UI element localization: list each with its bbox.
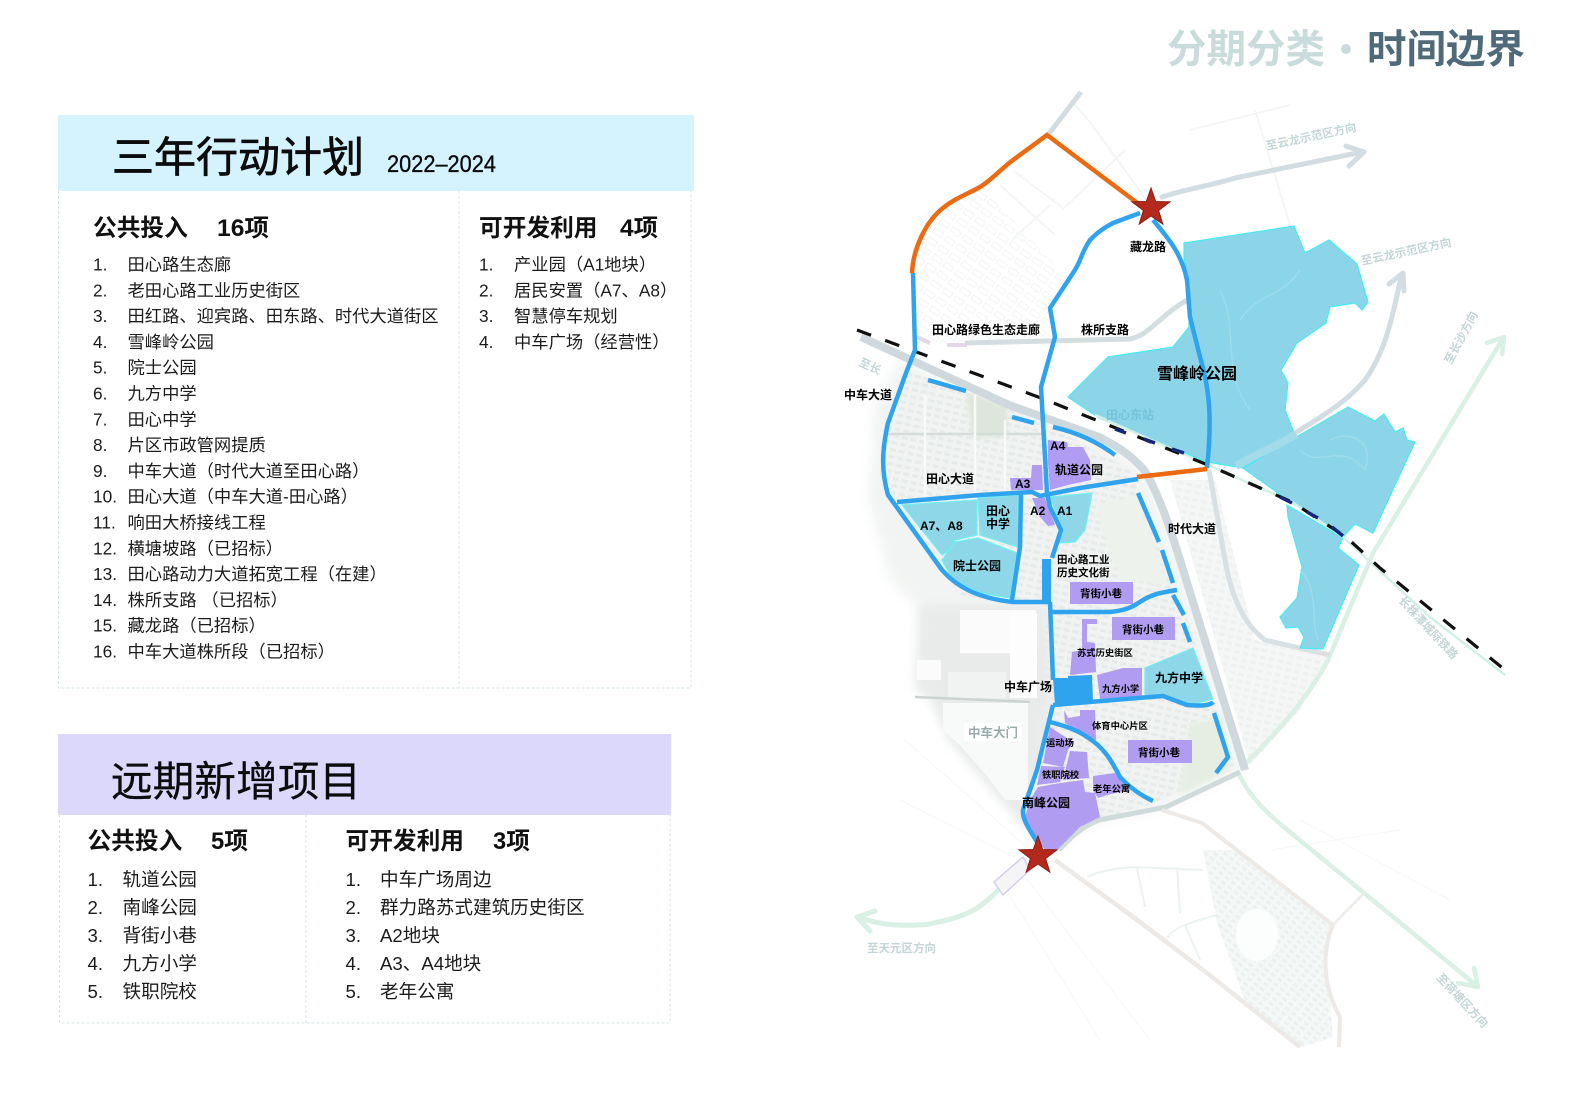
three-year plan header band: 三年行动计划	[112, 134, 364, 181]
map labels: roads and places: 院士公园	[953, 558, 1001, 573]
map labels: roads and places: 轨道公园	[1055, 462, 1103, 477]
map labels: roads and places: 南峰公园	[1022, 795, 1070, 810]
column: public investment 16 items: 3.	[93, 306, 107, 326]
soft green patches	[967, 393, 1007, 437]
orange roads	[912, 135, 1207, 477]
map labels: roads and places: 田心	[986, 504, 1010, 518]
east residential	[1170, 480, 1330, 765]
column: public investment 5 items: 2.	[88, 897, 103, 918]
three-year plan header band	[58, 115, 694, 191]
base map context	[868, 100, 1450, 1047]
column: developable 4 items: 4.	[479, 332, 493, 352]
column: public investment 16 items: 14.	[93, 590, 117, 610]
map labels: roads and places: 背街小巷	[1122, 623, 1164, 636]
column: public investment 5 items: 1.	[88, 869, 103, 890]
column: public investment 16 items: 雪峰岭公园	[128, 332, 214, 352]
column: developable 5 items: 群力路苏式建筑历史街区	[380, 897, 585, 918]
column: developable 5 items: 可开发利用	[346, 828, 464, 855]
column: public investment 16 items: 16项	[217, 216, 269, 242]
column: public investment 16 items: 九方中学	[128, 384, 197, 404]
column: developable 4 items: 居民安置（A7、A8）	[514, 280, 677, 300]
map labels: roads and places: 株所支路	[1081, 322, 1129, 337]
column: developable 4 items: 1.	[479, 254, 493, 274]
map labels: roads and places: A4	[1050, 439, 1066, 453]
map labels: roads and places: A2	[1030, 504, 1046, 518]
column: public investment 16 items: 11.	[93, 512, 116, 532]
column: developable 5 items: 5.	[346, 981, 361, 1002]
map labels: roads and places: 运动场	[1046, 737, 1074, 748]
column: developable 5 items: 4.	[346, 953, 361, 974]
north faint estate	[915, 190, 1060, 345]
column: developable 4 items: 2.	[479, 280, 493, 300]
column: public investment 16 items: 老田心路工业历史街区	[128, 280, 300, 300]
column: public investment 5 items: 5项	[211, 829, 248, 855]
column: public investment 16 items: 10.	[93, 487, 117, 507]
map labels: direction and context: 至天元区方向	[867, 941, 936, 955]
arrow: to Changsha	[1247, 337, 1504, 762]
column: public investment 16 items	[93, 215, 439, 662]
map labels: roads and places: 藏龙路	[1130, 239, 1166, 254]
column: developable 5 items: 3项	[493, 829, 530, 855]
column: public investment 16 items: 响田大桥接线工程	[128, 512, 266, 532]
column: public investment 5 items: 3.	[88, 925, 103, 946]
south-east residential cluster	[1203, 850, 1333, 1047]
map labels: roads and places: 体育中心片区	[1092, 720, 1148, 731]
column: public investment 16 items: 田心大道（中车大道-田心路）	[128, 487, 358, 507]
long-term header band	[58, 734, 671, 815]
column: public investment 16 items: 院士公园	[128, 358, 197, 378]
map	[844, 92, 1505, 1047]
map labels: roads and places: 田心大道	[926, 471, 974, 486]
map labels: roads and places: 时代大道	[1168, 521, 1216, 536]
column: public investment 16 items: 4.	[93, 332, 107, 352]
road widened blocks	[1042, 559, 1093, 705]
map labels: direction and context: 田心东站	[1106, 407, 1154, 422]
map labels: direction and context: 至云龙示范区方向	[1360, 235, 1453, 268]
column: public investment 5 items: 轨道公园	[122, 869, 197, 890]
map labels: roads and places: 九方中学	[1155, 670, 1203, 685]
map labels: direction and context: 至荷塘区方向	[1434, 970, 1491, 1031]
column: public investment 5 items: 铁职院校	[122, 981, 197, 1002]
panel: three-year action plan	[58, 115, 694, 688]
map labels: roads and places: 中学	[986, 516, 1010, 531]
map labels: roads and places: 雪峰岭公园	[1157, 364, 1237, 383]
map labels: roads and places: A1	[1057, 504, 1073, 518]
map labels: direction and context: 至云龙示范区方向	[1265, 120, 1358, 153]
park texture and river band	[1220, 270, 1367, 640]
column: public investment 16 items: 1.	[93, 254, 107, 274]
column: developable 5 items: 2.	[346, 897, 361, 918]
column: public investment 16 items: 7.	[93, 409, 107, 429]
arrow: to Hetang	[1238, 773, 1478, 987]
map labels: roads and places: 九方小学	[1102, 683, 1139, 694]
star: south node	[1019, 836, 1057, 872]
map labels: roads and places: A3	[1015, 477, 1031, 491]
map labels: roads and places: 田心路绿色生态走廊	[932, 322, 1040, 337]
column: public investment 5 items: 九方小学	[122, 953, 197, 974]
map labels: roads and places: 田心路工业	[1057, 553, 1110, 566]
map labels: direction and context: 至长	[857, 355, 884, 378]
column: developable 4 items: 智慧停车规划	[514, 306, 618, 326]
column: public investment 16 items: 12.	[93, 538, 117, 558]
column: public investment 16 items: 2.	[93, 280, 107, 300]
column: public investment 5 items: 公共投入	[88, 828, 183, 855]
page title: 时间边界	[1367, 28, 1525, 72]
map labels: roads and places: 苏式历史街区	[1077, 647, 1133, 658]
long-term header band: 远期新增项目	[111, 758, 361, 805]
column: developable 5 items: A2地块	[380, 925, 440, 946]
direction arrows	[857, 146, 1504, 987]
column: public investment 16 items: 公共投入	[93, 215, 188, 242]
column: public investment 16 items: 中车大道株所段（已招标）	[128, 642, 335, 662]
west factory zone	[915, 605, 1050, 835]
column: public investment 16 items: 8.	[93, 435, 107, 455]
column: developable 4 items: 产业园（A1地块）	[514, 254, 656, 274]
page title: 分期分类	[1167, 28, 1325, 72]
blue roads	[883, 213, 1228, 842]
map labels: roads and places: 背街小巷	[1080, 587, 1122, 600]
railway dashed line	[857, 330, 1505, 675]
column: public investment 16 items: 6.	[93, 384, 107, 404]
map labels: direction and context: 至长沙方向	[1441, 309, 1481, 366]
column: public investment 16 items: 横塘坡路（已招标）	[128, 538, 283, 558]
column: developable 4 items: 可开发利用	[479, 215, 597, 242]
column: public investment 16 items: 田心路生态廊	[128, 254, 231, 274]
map labels: direction and context	[857, 120, 1491, 1031]
arrow: to Tianyuan	[857, 878, 1010, 931]
column: public investment 5 items	[88, 828, 248, 1002]
column: public investment 16 items: 5.	[93, 358, 107, 378]
column: developable 5 items: 中车广场周边	[380, 869, 492, 890]
map labels: direction and context: 长株潭城际铁路	[1396, 593, 1461, 662]
column: public investment 16 items: 13.	[93, 564, 117, 584]
purple parcels	[1010, 440, 1192, 851]
column: public investment 16 items: 田红路、迎宾路、田东路、时代大道街区	[128, 306, 439, 326]
column: developable 4 items: 中车广场（经营性）	[514, 332, 670, 352]
column: developable 5 items: 1.	[346, 869, 361, 890]
column: public investment 16 items: 片区市政管网提质	[128, 435, 266, 455]
page title	[1167, 28, 1525, 72]
column: public investment 16 items: 田心中学	[128, 409, 197, 429]
column: developable 5 items	[346, 828, 585, 1002]
three-year plan header band: 2022–2024	[387, 151, 496, 178]
map labels: roads and places: A7、A8	[920, 519, 963, 533]
map labels: roads and places: 背街小巷	[1138, 746, 1180, 759]
map labels: roads and places	[844, 239, 1237, 810]
column: developable 4 items	[479, 215, 677, 352]
map labels: roads and places: 中车广场	[1004, 679, 1052, 694]
column: developable 5 items: 老年公寓	[380, 981, 454, 1002]
arrow: to Yunlong north	[1162, 146, 1364, 197]
panel: long-term new projects	[58, 734, 671, 1023]
column: public investment 5 items: 5.	[88, 981, 103, 1002]
map labels: direction and context: 中车大门	[968, 725, 1018, 740]
column: developable 5 items: A3、A4地块	[380, 953, 481, 974]
column: public investment 16 items: 田心路动力大道拓宽工程（在建）	[128, 564, 387, 584]
map labels: roads and places: 历史文化街	[1057, 566, 1110, 579]
map labels: roads and places: 老年公寓	[1093, 783, 1130, 794]
cyan parcels: development plots	[902, 493, 1213, 705]
column: public investment 16 items: 株所支路 （已招标）	[128, 590, 288, 610]
column: public investment 16 items: 16.	[93, 642, 117, 662]
column: public investment 16 items: 9.	[93, 461, 107, 481]
column: public investment 5 items: 南峰公园	[122, 897, 197, 918]
column: public investment 16 items: 藏龙路（已招标）	[128, 616, 266, 636]
column: public investment 16 items: 中车大道（时代大道至田心路）	[128, 461, 369, 481]
map labels: roads and places: 中车大道	[844, 387, 892, 402]
column: developable 4 items: 4项	[620, 216, 658, 242]
cyan parcels: Xuefengling park	[1068, 226, 1415, 649]
star: north node	[1132, 188, 1170, 224]
grey roads	[861, 92, 1364, 1047]
column: developable 4 items: 3.	[479, 306, 493, 326]
column: public investment 5 items: 4.	[88, 953, 103, 974]
column: developable 5 items: 3.	[346, 925, 361, 946]
arrow: to Yunlong east	[1295, 273, 1404, 433]
column: public investment 5 items: 背街小巷	[122, 925, 197, 946]
column: public investment 16 items: 15.	[93, 616, 117, 636]
map labels: roads and places: 铁职院校	[1042, 769, 1080, 780]
